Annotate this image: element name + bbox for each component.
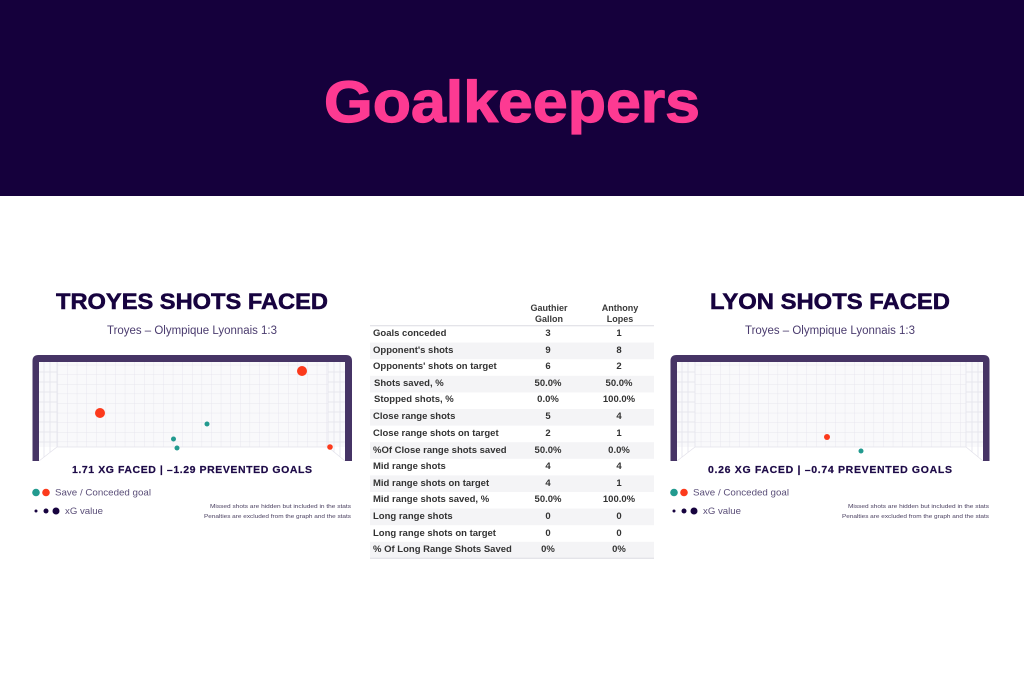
legend: save / conceded: Save / Conceded goal (55, 488, 151, 498)
row: stopped shots: 0.0% (537, 394, 559, 405)
row: close range on target: Close range shots on target (373, 428, 499, 439)
row: mid range shots (373, 461, 622, 472)
row: mid range saved: Mid range shots saved, % (373, 494, 490, 505)
shot: save (858, 448, 864, 454)
footnotes: Troyes (204, 504, 351, 520)
heading: Lyon: LYON SHOTS FACED (710, 289, 950, 314)
xG summary: Troyes: 1.71 XG FACED | –1.29 PREVENTED GOALS (72, 464, 312, 476)
column header: Anthony Lopes (602, 303, 638, 324)
row: close range shots: Close range shots (373, 411, 455, 422)
legend: xG value (34, 506, 103, 517)
legend: xG value: xG value (703, 506, 741, 517)
heading: Troyes: TROYES SHOTS FACED (56, 289, 328, 314)
row: stopped shots (374, 394, 636, 405)
row: opponent's shots: Opponent's shots (373, 345, 453, 356)
footnotes: Troyes: Missed shots are hidden but included in the stats (210, 504, 351, 510)
row: long range shots: Long range shots (373, 511, 453, 522)
title: Goalkeepers (324, 70, 700, 135)
row: close range shots: 4 (616, 411, 622, 422)
row: long range saved: 0% (612, 544, 626, 555)
row: opponent's shots: 8 (616, 345, 622, 356)
row: shots saved: 50.0% (535, 378, 562, 389)
row: mid range saved: 50.0% (535, 494, 562, 505)
goal diagram: Lyon (670, 355, 990, 461)
row: mid range saved (373, 494, 636, 505)
legend: xG value: xG value (65, 506, 103, 517)
row: close range on target: 1 (616, 428, 622, 439)
xG summary: Lyon: 0.26 XG FACED | –0.74 PREVENTED GOALS (708, 464, 952, 476)
row: long range shots (373, 511, 622, 522)
row: shots saved (374, 378, 633, 389)
shot: conceded goal (297, 366, 307, 376)
row: long range on target: 0 (616, 528, 622, 539)
panel: goalkeeper stats table (370, 303, 654, 558)
row: shots on target: Opponents' shots on target (373, 361, 497, 372)
row: close range saved: 50.0% (535, 445, 562, 456)
row: close range on target (373, 428, 622, 439)
row: close range on target: 2 (545, 428, 551, 439)
row: mid range shots: 4 (545, 461, 551, 472)
row: stopped shots: Stopped shots, % (374, 394, 454, 405)
row: mid range saved: 100.0% (603, 494, 636, 505)
shot: save (174, 446, 180, 450)
column header: Gauthier Gallon: Gallon (535, 314, 563, 324)
row: mid range on target: Mid range shots on target (373, 478, 490, 489)
footnotes: Troyes: Penalties are excluded from the graph and the stats (204, 514, 351, 520)
row: shots saved: Shots saved, % (374, 378, 444, 389)
row: stopped shots: 100.0% (603, 394, 636, 405)
row: long range on target (373, 528, 622, 539)
column header: Anthony Lopes: Lopes (607, 314, 633, 324)
row: long range shots: 0 (545, 511, 551, 522)
footnotes: Lyon: Missed shots are hidden but included in the stats (848, 504, 989, 510)
legend: save / conceded: Save / Conceded goal (693, 488, 789, 498)
footnotes: Lyon: Penalties are excluded from the graph and the stats (842, 514, 989, 520)
row: close range shots: 5 (545, 411, 551, 422)
row: mid range shots: Mid range shots (373, 461, 446, 472)
column header: Gauthier Gallon: Gauthier (530, 303, 568, 313)
row: opponent's shots: 9 (545, 345, 551, 356)
row: close range shots (373, 411, 622, 422)
panel: Troyes shots faced (32, 289, 352, 520)
row: goals conceded (373, 328, 622, 339)
row: mid range on target: 1 (616, 478, 622, 489)
row: long range saved: % Of Long Range Shots Saved (373, 544, 512, 555)
goal diagram: Troyes (32, 355, 352, 461)
shot: conceded goal (327, 444, 333, 450)
shot: save (171, 436, 176, 442)
column header: Gauthier Gallon (530, 303, 568, 324)
row: close range saved: 0.0% (608, 445, 630, 456)
row: long range saved: 0% (541, 544, 555, 555)
legend: xG value (672, 506, 741, 517)
row: goals conceded: 3 (545, 328, 551, 339)
row: shots on target: 6 (545, 361, 551, 372)
row: close range saved: %Of Close range shots saved (373, 445, 507, 456)
header banner (0, 0, 1024, 196)
row: long range saved (373, 544, 626, 555)
row: goals conceded: Goals conceded (373, 328, 447, 339)
row: shots saved: 50.0% (606, 378, 633, 389)
row: shots on target: 2 (616, 361, 622, 372)
match subtitle: Lyon: Troyes – Olympique Lyonnais 1:3 (745, 325, 915, 337)
column header: Anthony Lopes: Anthony (602, 303, 638, 313)
panel: Lyon shots faced (670, 289, 990, 520)
row: mid range shots: 4 (616, 461, 622, 472)
row: long range on target: Long range shots on target (373, 528, 497, 539)
row: opponent's shots (373, 345, 622, 356)
match subtitle: Troyes: Troyes – Olympique Lyonnais 1:3 (107, 325, 277, 337)
shot: save (204, 422, 210, 426)
row: mid range on target: 4 (545, 478, 551, 489)
row: long range on target: 0 (545, 528, 551, 539)
row: close range saved (373, 445, 630, 456)
row: long range shots: 0 (616, 511, 622, 522)
row: goals conceded: 1 (616, 328, 622, 339)
row: shots on target (373, 361, 622, 372)
shot: conceded goal (95, 408, 105, 418)
row: mid range on target (373, 478, 622, 489)
shot: conceded goal (824, 434, 830, 440)
footnotes: Lyon (842, 504, 989, 520)
